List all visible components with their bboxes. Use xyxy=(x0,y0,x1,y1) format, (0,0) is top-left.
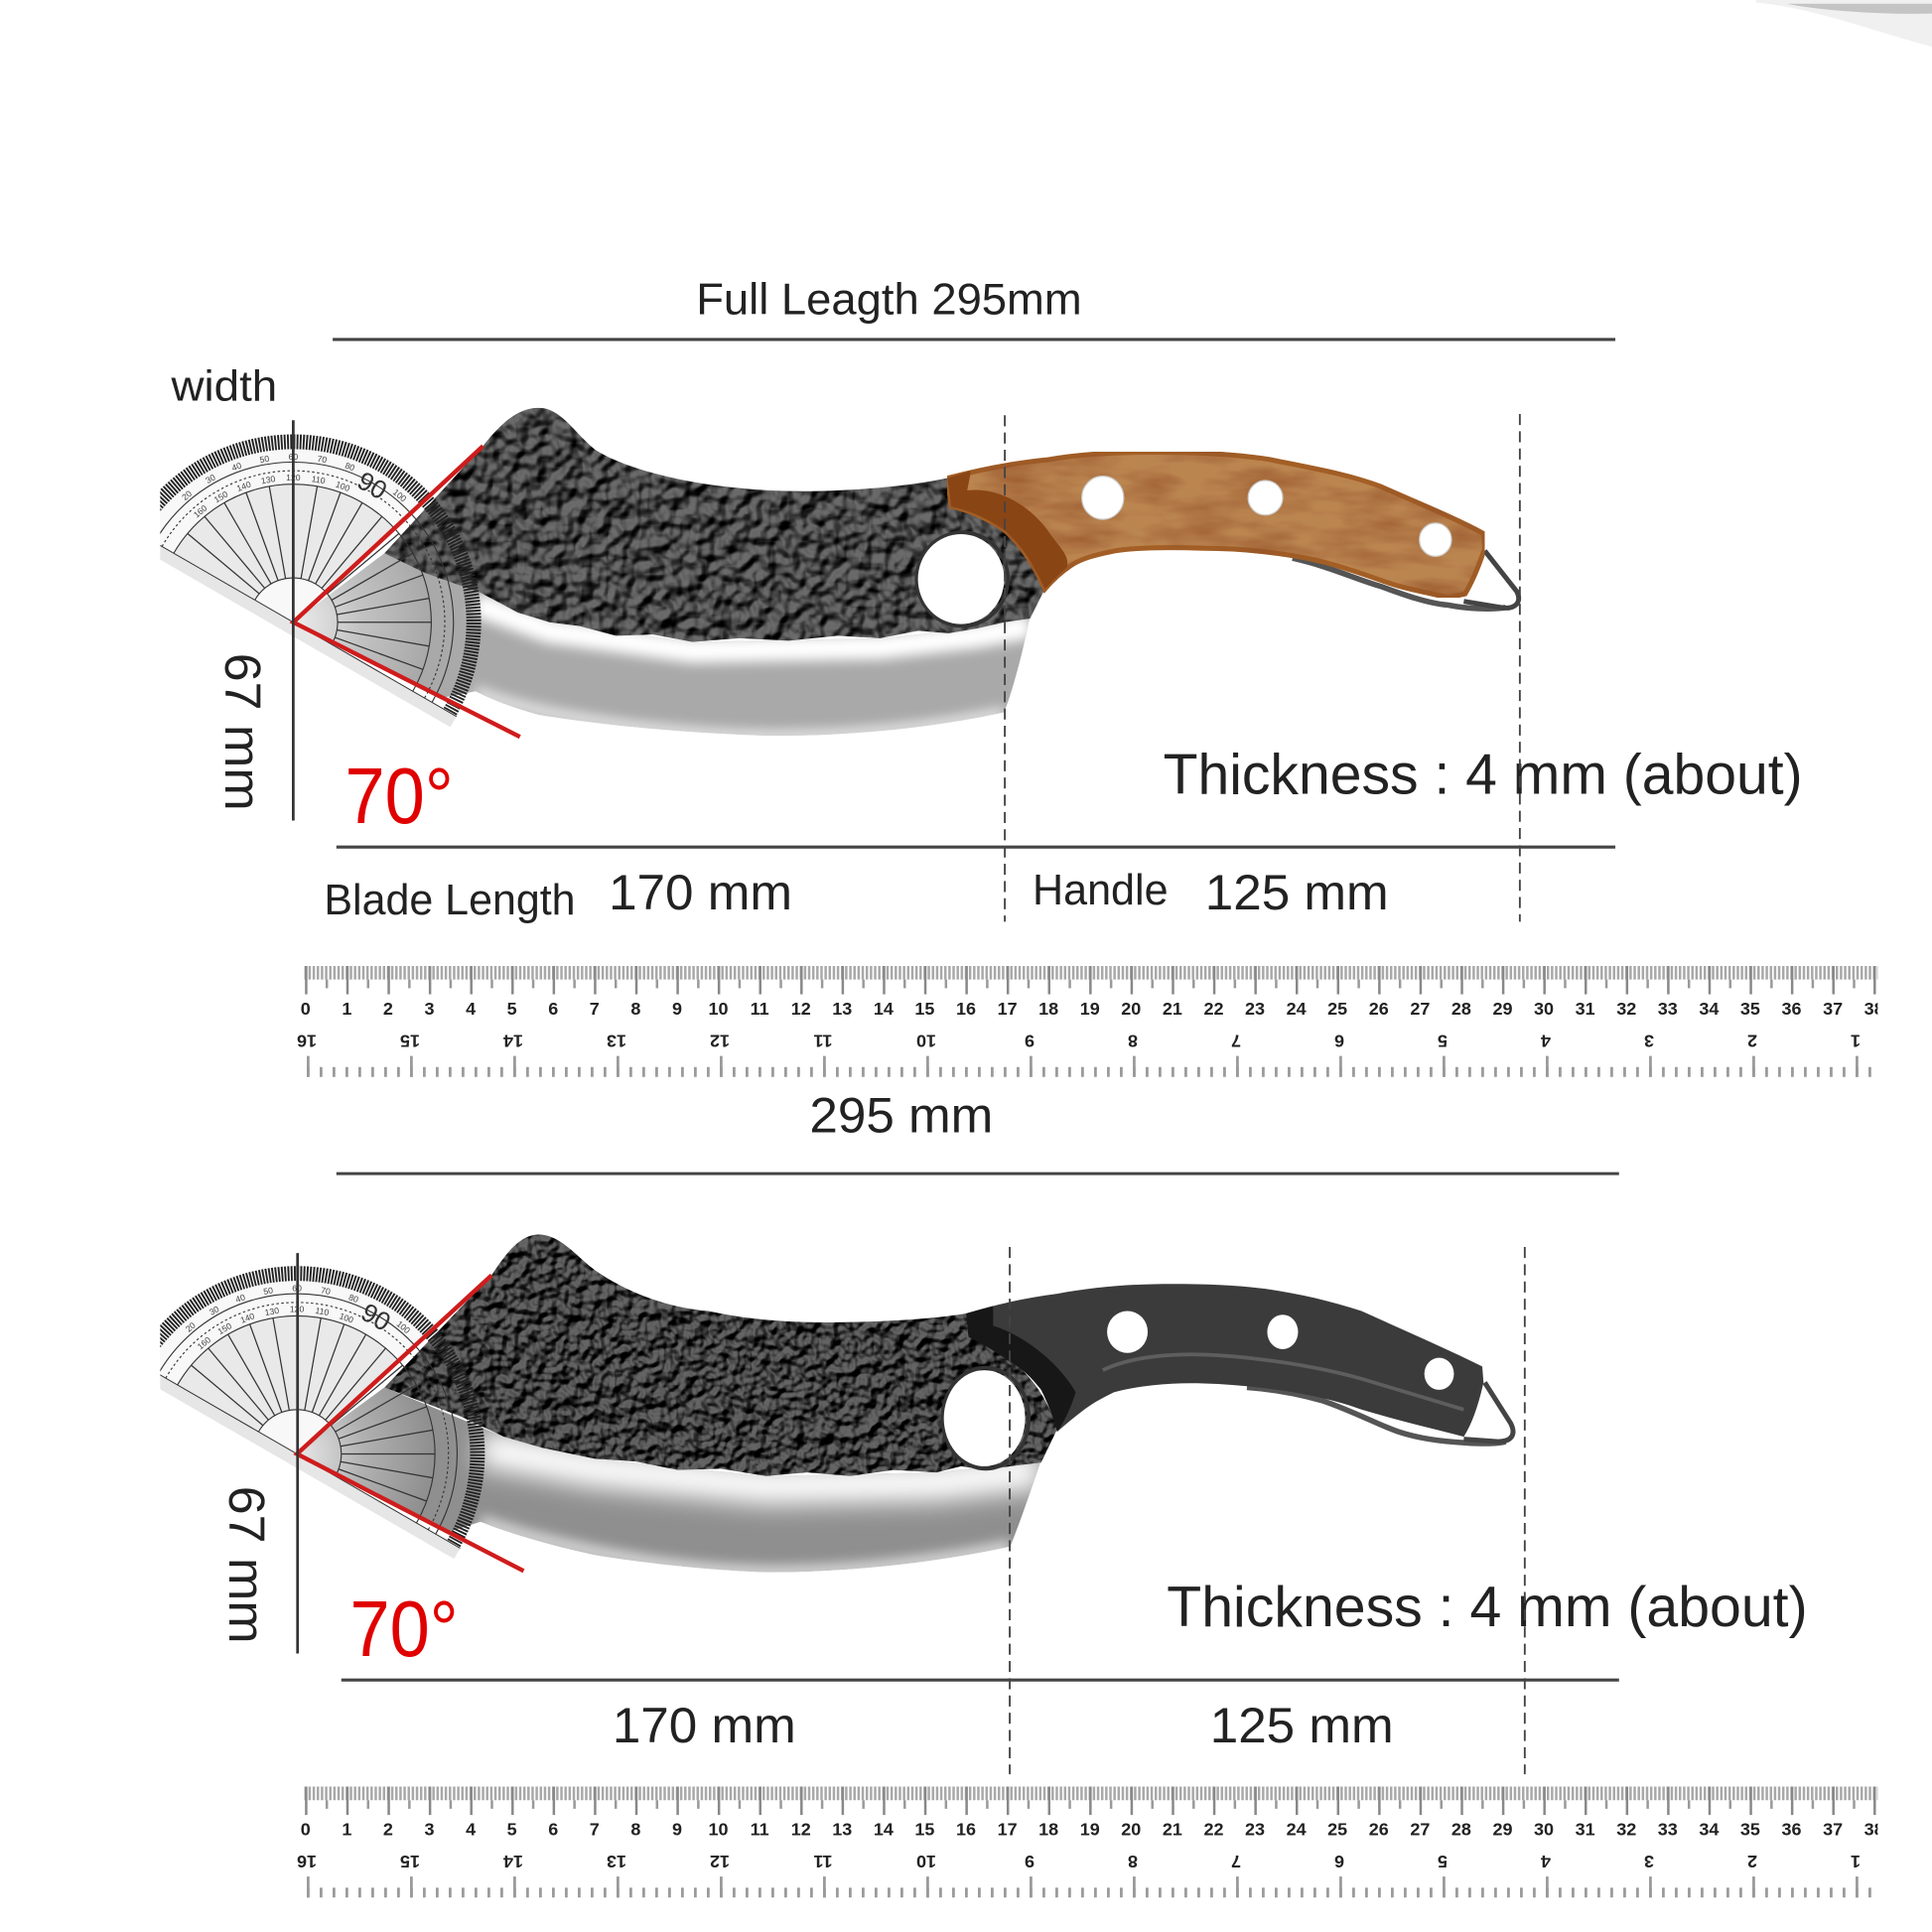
red angle lines 1 xyxy=(293,446,520,737)
protractor 2: 30 xyxy=(207,1304,221,1317)
knife 2: black handle xyxy=(301,1235,1515,1573)
protractor 1: 120 xyxy=(286,473,301,483)
ruler 2: 6 xyxy=(1334,1852,1344,1871)
protractor 2: 160 xyxy=(196,1334,212,1351)
protractor 1: 60 xyxy=(289,452,298,462)
ruler 2: 30 xyxy=(1534,1820,1554,1840)
ruler 1: 12 xyxy=(791,999,811,1019)
ruler 1: 23 xyxy=(1245,999,1265,1019)
ruler 1: 22 xyxy=(1203,999,1223,1019)
blade 2 hammered steel xyxy=(376,1226,1066,1484)
dashed marker handle end xyxy=(1519,414,1521,921)
ruler 1: 26 xyxy=(1369,999,1389,1019)
dashed marker blade/handle 2 xyxy=(1009,1247,1011,1774)
blade 1 silver edge xyxy=(298,553,1030,736)
ruler 1: 18 xyxy=(1038,999,1058,1019)
protractor 2: 120 xyxy=(290,1305,305,1314)
ruler 1: 6 xyxy=(548,999,558,1019)
label: 70 degrees second: 70° xyxy=(349,1585,459,1673)
label: thickness: Thickness : 4 mm (about) xyxy=(1164,743,1803,806)
value: 170 mm: 170 mm xyxy=(609,865,792,920)
ruler 1: 16 xyxy=(297,1031,317,1050)
protractor 2: 20 xyxy=(184,1320,198,1334)
ruler 2: 14 xyxy=(874,1820,894,1840)
protractor 1: 140 xyxy=(235,480,252,493)
ruler 1: 14 xyxy=(874,999,894,1019)
ruler 2: 23 xyxy=(1245,1820,1265,1840)
ruler 1: 0 xyxy=(301,999,311,1019)
protractor 1 xyxy=(160,435,482,727)
ruler 1: 13 xyxy=(607,1031,626,1050)
protractor 2: 90 xyxy=(356,1297,396,1337)
protractor 2: 100 xyxy=(395,1318,412,1335)
ruler 1: 5 xyxy=(1438,1031,1448,1050)
ruler 2: 14 xyxy=(503,1852,523,1871)
ruler 2: 22 xyxy=(1203,1820,1223,1840)
ruler 2: 15 xyxy=(400,1852,420,1871)
ruler 2: 32 xyxy=(1616,1820,1636,1840)
ruler 1: 28 xyxy=(1451,999,1471,1019)
ruler 1: 35 xyxy=(1740,999,1760,1019)
ruler 1: 24 xyxy=(1287,999,1307,1019)
ruler 1: 20 xyxy=(1121,999,1141,1019)
protractor 2: 60 xyxy=(292,1284,302,1294)
ruler 2: 38 xyxy=(1864,1820,1884,1840)
ruler 2: 1 xyxy=(342,1820,351,1840)
label: thickness second: Thickness : 4 mm (about) xyxy=(1167,1576,1808,1639)
ruler 1: 29 xyxy=(1492,999,1512,1019)
ruler 2: 4 xyxy=(1541,1852,1551,1871)
width axis 2 xyxy=(297,1253,299,1654)
ruler 2: 13 xyxy=(607,1852,626,1871)
blade 1 hammered steel xyxy=(369,400,1059,647)
ruler 1: 14 xyxy=(503,1031,523,1050)
protractor 1: 50 xyxy=(259,454,270,465)
ruler 2: 7 xyxy=(590,1820,600,1840)
ruler 1: 9 xyxy=(672,999,682,1019)
label: blade length: Blade Length xyxy=(324,877,576,924)
ruler 2: 12 xyxy=(710,1852,730,1871)
ruler 2: 16 xyxy=(956,1820,976,1840)
ruler 2: 6 xyxy=(548,1820,558,1840)
ruler 1: 30 xyxy=(1534,999,1554,1019)
protractor 2 xyxy=(160,1266,484,1559)
handle 2 ridge highlight xyxy=(1103,1354,1463,1410)
ruler 1: 4 xyxy=(1541,1031,1551,1050)
ruler 2: 4 xyxy=(466,1820,476,1840)
ruler 1: 7 xyxy=(590,999,600,1019)
ruler 2: 35 xyxy=(1740,1820,1760,1840)
ruler 2: 28 xyxy=(1451,1820,1471,1840)
ruler 2: 15 xyxy=(914,1820,934,1840)
ruler 1: 38 xyxy=(1864,999,1884,1019)
ruler 2: 11 xyxy=(814,1852,833,1871)
ruler 1: 4 xyxy=(466,999,476,1019)
ruler 1: 15 xyxy=(400,1031,420,1050)
red angle lines 2 xyxy=(297,1276,523,1571)
protractor 1: 30 xyxy=(204,472,217,485)
ruler 2: 3 xyxy=(1644,1852,1654,1871)
ruler 1: 15 xyxy=(914,999,934,1019)
label: 70 degrees: 70° xyxy=(345,752,454,840)
protractor 2: 50 xyxy=(263,1285,274,1297)
blade 2 silver edge xyxy=(301,1388,1040,1573)
full length rule 2 xyxy=(337,1173,1619,1174)
handle 2 tang and lanyard loop xyxy=(1247,1382,1513,1444)
protractor 2: 80 xyxy=(347,1292,360,1305)
ruler 1: 34 xyxy=(1699,999,1719,1019)
ruler 2: 9 xyxy=(672,1820,682,1840)
handle 2 black body xyxy=(966,1284,1483,1437)
protractor 2: 40 xyxy=(234,1292,246,1305)
label: handle: Handle xyxy=(1033,867,1169,914)
ruler 1: 33 xyxy=(1658,999,1678,1019)
ruler 1: 1 xyxy=(342,999,351,1019)
ruler 1: 5 xyxy=(507,999,517,1019)
protractor 1: 70 xyxy=(317,454,328,465)
protractor 1: 20 xyxy=(180,488,194,502)
protractor 2: 140 xyxy=(239,1311,256,1325)
label: width: width xyxy=(170,362,277,410)
ruler 1: 31 xyxy=(1576,999,1595,1019)
protractor 1: 90 xyxy=(352,466,392,505)
handle 1 rivets xyxy=(1082,477,1451,556)
protractor 2: 100 xyxy=(338,1311,355,1325)
blade and handle rule 2 xyxy=(342,1679,1619,1681)
protractor 2: 70 xyxy=(320,1285,332,1297)
ruler 2: 8 xyxy=(630,1820,640,1840)
value: 170 mm second: 170 mm xyxy=(613,1698,796,1753)
ruler 2: 18 xyxy=(1038,1820,1058,1840)
ruler 1: 2 xyxy=(383,999,393,1019)
ruler 2: 16 xyxy=(297,1852,317,1871)
protractor 1: 160 xyxy=(192,503,209,520)
ruler 1: 1 xyxy=(1851,1031,1861,1050)
blade 1 hole xyxy=(916,532,1008,625)
ruler 1: 9 xyxy=(1025,1031,1035,1050)
ruler 2: 37 xyxy=(1823,1820,1843,1840)
ruler 2: 7 xyxy=(1231,1852,1241,1871)
protractor 1: 80 xyxy=(344,461,356,473)
ruler 2: 8 xyxy=(1128,1852,1138,1871)
ruler 1: 37 xyxy=(1823,999,1843,1019)
ruler 2: 5 xyxy=(507,1820,517,1840)
ruler 1: 13 xyxy=(832,999,852,1019)
ruler 2: 2 xyxy=(383,1820,393,1840)
ruler 1: 8 xyxy=(1128,1031,1138,1050)
ruler 2 xyxy=(297,1793,1884,1892)
handle 1 bolster xyxy=(947,471,1067,589)
value: 125 mm second: 125 mm xyxy=(1210,1698,1394,1753)
ruler 1: 3 xyxy=(425,999,435,1019)
protractor 1: 100 xyxy=(335,480,351,493)
handle 1 wood xyxy=(947,452,1484,598)
ruler 1: 21 xyxy=(1163,999,1182,1019)
ruler 1: 36 xyxy=(1782,999,1802,1019)
ruler 2: 9 xyxy=(1025,1852,1035,1871)
label: 295 mm: 295 mm xyxy=(809,1088,993,1144)
ruler 2: 34 xyxy=(1699,1820,1719,1840)
ruler 2: 0 xyxy=(301,1820,311,1840)
ruler 2: 12 xyxy=(791,1820,811,1840)
ruler 1: 27 xyxy=(1410,999,1430,1019)
ruler 1: 19 xyxy=(1080,999,1100,1019)
ruler 2: 1 xyxy=(1851,1852,1861,1871)
handle 1 tang and lanyard loop xyxy=(1293,551,1519,609)
ruler 1: 7 xyxy=(1231,1031,1241,1050)
ruler 2: 36 xyxy=(1782,1820,1802,1840)
ruler 1: 11 xyxy=(751,999,769,1019)
protractor 1: 130 xyxy=(260,474,276,485)
ruler 2: 33 xyxy=(1658,1820,1678,1840)
ruler 1: 32 xyxy=(1616,999,1636,1019)
ruler 1: 8 xyxy=(630,999,640,1019)
ruler 1: 2 xyxy=(1747,1031,1757,1050)
full length rule xyxy=(333,339,1615,341)
width axis 1 xyxy=(292,420,294,821)
ruler 2: 27 xyxy=(1410,1820,1430,1840)
blade and handle rule xyxy=(337,846,1615,848)
ruler 2: 10 xyxy=(709,1820,729,1840)
ruler 1: 6 xyxy=(1334,1031,1344,1050)
ruler 2: 11 xyxy=(751,1820,769,1840)
ruler 2: 26 xyxy=(1369,1820,1389,1840)
ruler 2: 5 xyxy=(1438,1852,1448,1871)
protractor 2: 150 xyxy=(215,1320,233,1336)
value: 125 mm: 125 mm xyxy=(1205,865,1389,920)
ruler 1: 12 xyxy=(710,1031,730,1050)
ruler 2: 21 xyxy=(1163,1820,1182,1840)
label: 67 mm second: 67 mm xyxy=(218,1486,275,1644)
ruler 1: 25 xyxy=(1327,999,1347,1019)
ruler 1 xyxy=(297,973,1884,1072)
ruler 2: 13 xyxy=(832,1820,852,1840)
dashed marker blade/handle xyxy=(1004,415,1006,921)
heading: full length: Full Leagth 295mm xyxy=(696,275,1082,324)
protractor 1: 110 xyxy=(311,474,327,485)
corner swoosh xyxy=(1756,0,1932,47)
ruler 2: 2 xyxy=(1747,1852,1757,1871)
knife 1: wood handle xyxy=(158,400,1519,758)
ruler 2: 10 xyxy=(916,1852,936,1871)
ruler 2: 3 xyxy=(425,1820,435,1840)
protractor 1: 100 xyxy=(391,486,408,504)
ruler 1: 10 xyxy=(709,999,729,1019)
protractor 1: 150 xyxy=(212,489,229,504)
ruler 2: 20 xyxy=(1121,1820,1141,1840)
protractor 2: 110 xyxy=(315,1306,330,1317)
ruler 2: 31 xyxy=(1576,1820,1595,1840)
blade 2 hole xyxy=(942,1368,1029,1468)
ruler 2: 19 xyxy=(1080,1820,1100,1840)
protractor 2: 130 xyxy=(264,1306,280,1317)
dashed marker handle end 2 xyxy=(1524,1247,1526,1774)
label: 67 mm: 67 mm xyxy=(214,653,271,811)
ruler 1: 3 xyxy=(1644,1031,1654,1050)
handle 2 bolster xyxy=(966,1307,1075,1432)
ruler 2: 29 xyxy=(1492,1820,1512,1840)
handle 2 rivets xyxy=(1107,1311,1453,1390)
ruler 2: 24 xyxy=(1287,1820,1307,1840)
ruler 1: 17 xyxy=(998,999,1018,1019)
ruler 1: 11 xyxy=(814,1031,833,1050)
ruler 2: 25 xyxy=(1327,1820,1347,1840)
protractor 1: 40 xyxy=(230,461,243,473)
ruler 1: 10 xyxy=(916,1031,936,1050)
ruler 1: 16 xyxy=(956,999,976,1019)
ruler 2: 17 xyxy=(998,1820,1018,1840)
